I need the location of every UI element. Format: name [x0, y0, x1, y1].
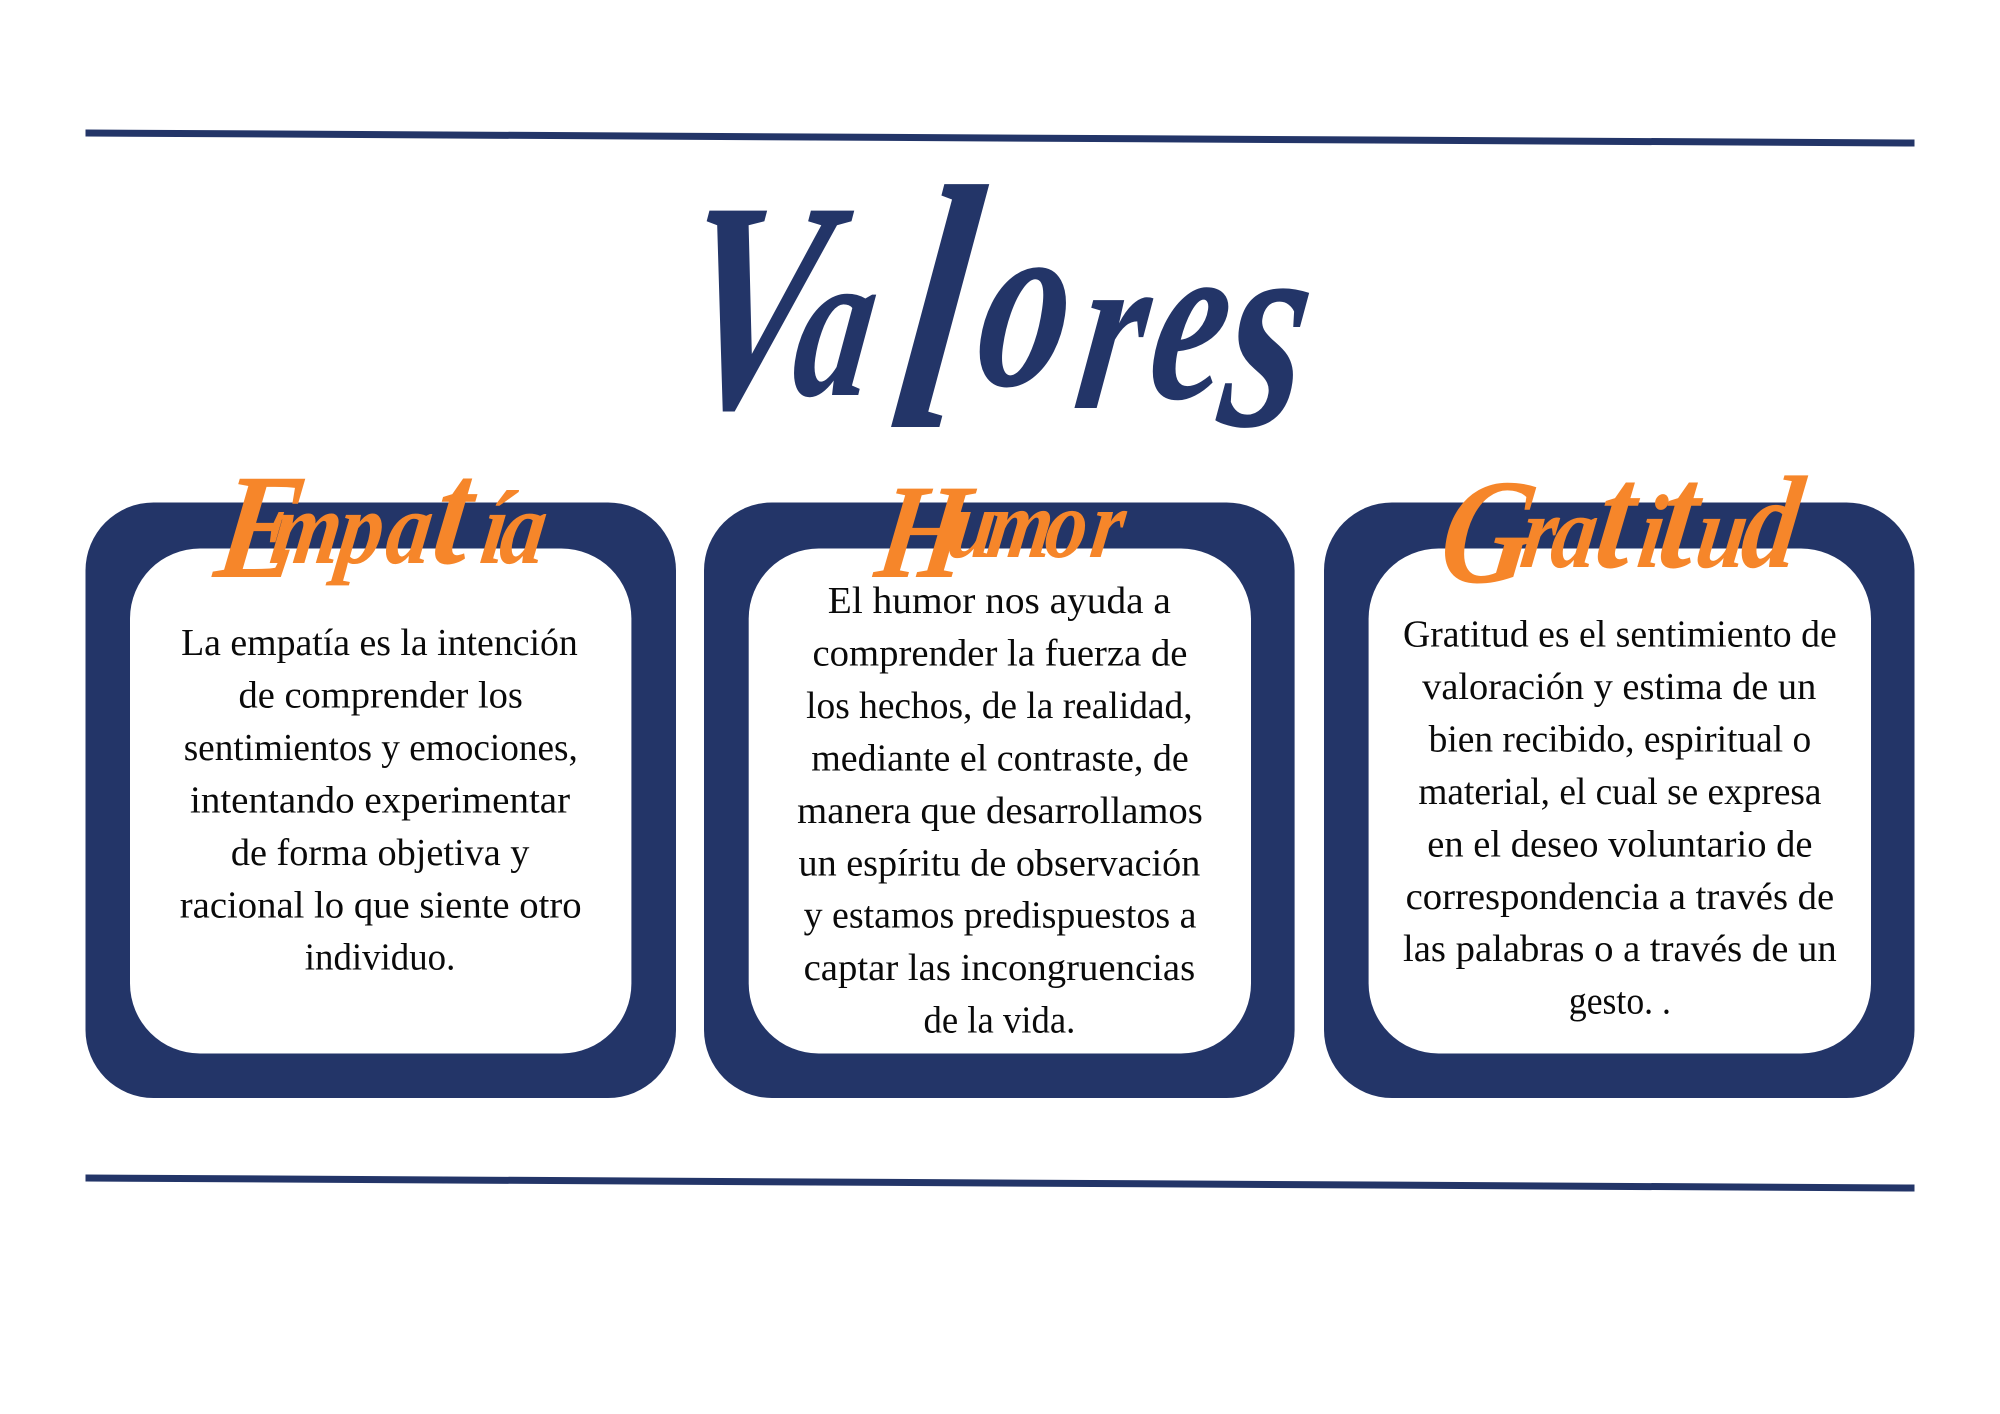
panel frame: Empatía: [86, 502, 676, 1098]
heading: Empatía: t: [425, 430, 487, 596]
text block: Gratitud: Gratitud es el sentimiento de: [1403, 614, 1837, 656]
text block: Empatía: individuo.: [305, 937, 455, 979]
heading: Empatía: p: [325, 471, 393, 587]
heading: Humor: u: [942, 469, 1004, 578]
heading: Gratitud: t: [1587, 434, 1650, 600]
text block: Empatía: de comprender los: [238, 674, 523, 716]
title: r: [1064, 198, 1168, 459]
heading: Humor: o: [1039, 469, 1096, 578]
title: V: [659, 140, 867, 472]
panel interior: Empatía: [130, 548, 631, 1054]
heading: Gratitud: a: [1545, 475, 1606, 591]
heading: Humor: H: [868, 458, 982, 607]
heading: Gratitud: t: [1650, 434, 1713, 600]
heading: Gratitud: u: [1690, 475, 1756, 591]
heading: Empatía: m: [265, 471, 350, 587]
text block: Humor: captar las incongruencias: [804, 947, 1195, 989]
panel interior: Gratitud: [1369, 548, 1871, 1054]
title: o: [964, 164, 1092, 440]
text block: Humor: los hechos, de la realidad,: [806, 685, 1193, 727]
text block: Gratitud: en el deseo voluntario de: [1427, 823, 1812, 865]
text block: Humor: de la vida.: [924, 1000, 1075, 1042]
heading: Gratitud: G: [1431, 449, 1547, 615]
text block: Humor: [797, 580, 1203, 1042]
title: s: [1205, 167, 1333, 489]
text block: Gratitud: [1403, 614, 1837, 1023]
text block: Empatía: sentimientos y emociones,: [184, 727, 578, 769]
heading: Empatía: í: [475, 471, 522, 587]
panel: Gratitud: [1324, 434, 1914, 1098]
text block: Humor: y estamos predispuestos a: [804, 895, 1197, 937]
text block: Empatía: racional lo que siente otro: [180, 884, 582, 926]
heading: Empatía: E: [206, 444, 316, 610]
text block: Gratitud: las palabras o a través de un: [1403, 928, 1837, 970]
text block: Humor: mediante el contraste, de: [811, 737, 1189, 779]
heading: Gratitud: r: [1515, 475, 1566, 591]
text block: Humor: comprender la fuerza de: [812, 632, 1188, 674]
title: a: [782, 203, 893, 442]
text block: Gratitud: correspondencia a través de: [1406, 876, 1834, 918]
text block: Humor: El humor nos ayuda a: [828, 580, 1171, 622]
text block: Humor: manera que desarrollamos: [797, 790, 1203, 832]
text block: Empatía: de forma objetiva y: [231, 832, 529, 874]
panel frame: Gratitud: [1324, 502, 1914, 1098]
text block: Gratitud: material, el cual se expresa: [1418, 771, 1822, 813]
heading: Gratitud: d: [1734, 449, 1813, 596]
text block: Humor: un espíritu de observación: [798, 842, 1200, 884]
text block: Gratitud: bien recibido, espiritual o: [1429, 718, 1811, 760]
text block: Empatía: [180, 622, 582, 979]
panel: Humor: [704, 458, 1295, 1098]
panel interior: Humor: [749, 548, 1251, 1054]
heading: Humor: m: [981, 469, 1061, 578]
heading: Empatía: a: [380, 471, 441, 587]
title: e: [1137, 188, 1249, 449]
text block: Gratitud: valoración y estima de un: [1422, 666, 1816, 708]
panel frame: Humor: [704, 502, 1295, 1098]
heading: Humor: r: [1085, 469, 1134, 578]
heading: Empatía: a: [494, 471, 555, 587]
title: l: [875, 116, 1000, 503]
text block: Empatía: La empatía es la intención: [181, 622, 578, 664]
text block: Empatía: intentando experimentar: [190, 779, 570, 821]
text block: Gratitud: gesto. .: [1569, 981, 1671, 1023]
heading: Gratitud: i: [1632, 475, 1673, 591]
panel: Empatía: [86, 430, 676, 1098]
